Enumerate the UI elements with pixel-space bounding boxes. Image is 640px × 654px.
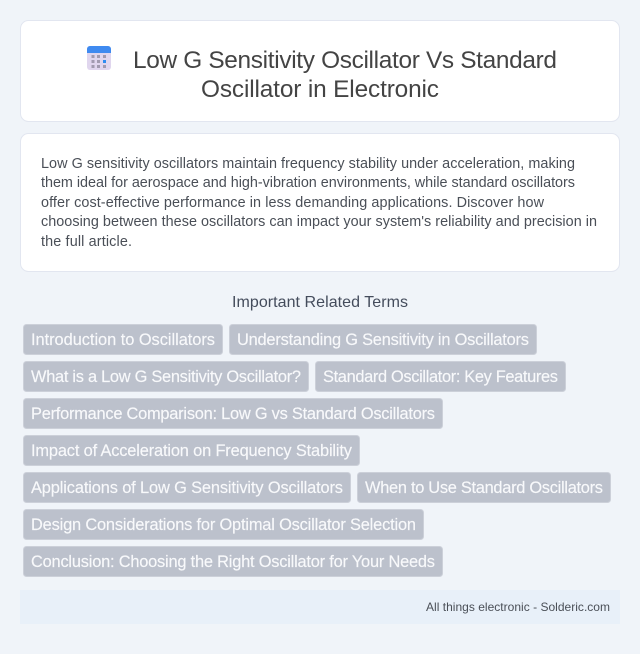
tag [24,324,222,354]
panel: title [20,20,620,122]
tag [24,398,442,428]
tag: Applications of Low G Sensitivity Oscillators [31,479,343,497]
tag: What is a Low G Sensitivity Oscillator? [31,368,301,386]
tag: Introduction to Oscillators [31,331,215,349]
summary text: offer cost-effective performance in less demanding applications. Discover how [41,195,545,211]
tag [24,362,308,392]
tag list [24,324,610,576]
summary text: Low G sensitivity oscillators maintain frequency stability under acceleration, making [41,156,575,172]
tag [24,436,360,466]
summary text: choosing between these oscillators can impact your system's reliability and precision in [41,214,597,230]
panel: summary [20,134,620,272]
footer text: All things electronic - Solderic.com [426,600,610,614]
heading: related terms: Important Related Terms [232,294,408,311]
footer [20,590,620,624]
summary text: them ideal for aerospace and high-vibration environments, while standard oscillators [41,175,575,191]
icon: calendar [87,46,111,70]
title text: Oscillator in Electronic [201,76,439,103]
tag [24,546,442,576]
tag: Design Considerations for Optimal Oscillator Selection [31,516,416,534]
tag: Impact of Acceleration on Frequency Stability [31,442,353,460]
tag: Understanding G Sensitivity in Oscillators [237,331,529,349]
tag [230,324,536,354]
tag: When to Use Standard Oscillators [365,479,603,497]
tag [24,510,424,540]
tag [316,362,566,392]
summary text: the full article. [41,234,132,250]
tag: Standard Oscillator: Key Features [323,368,558,386]
tag: Conclusion: Choosing the Right Oscillator for Your Needs [31,553,435,571]
tag [358,472,610,502]
title text: Low G Sensitivity Oscillator Vs Standard [133,47,557,74]
tag: Performance Comparison: Low G vs Standard Oscillators [31,405,435,423]
tag [24,472,350,502]
